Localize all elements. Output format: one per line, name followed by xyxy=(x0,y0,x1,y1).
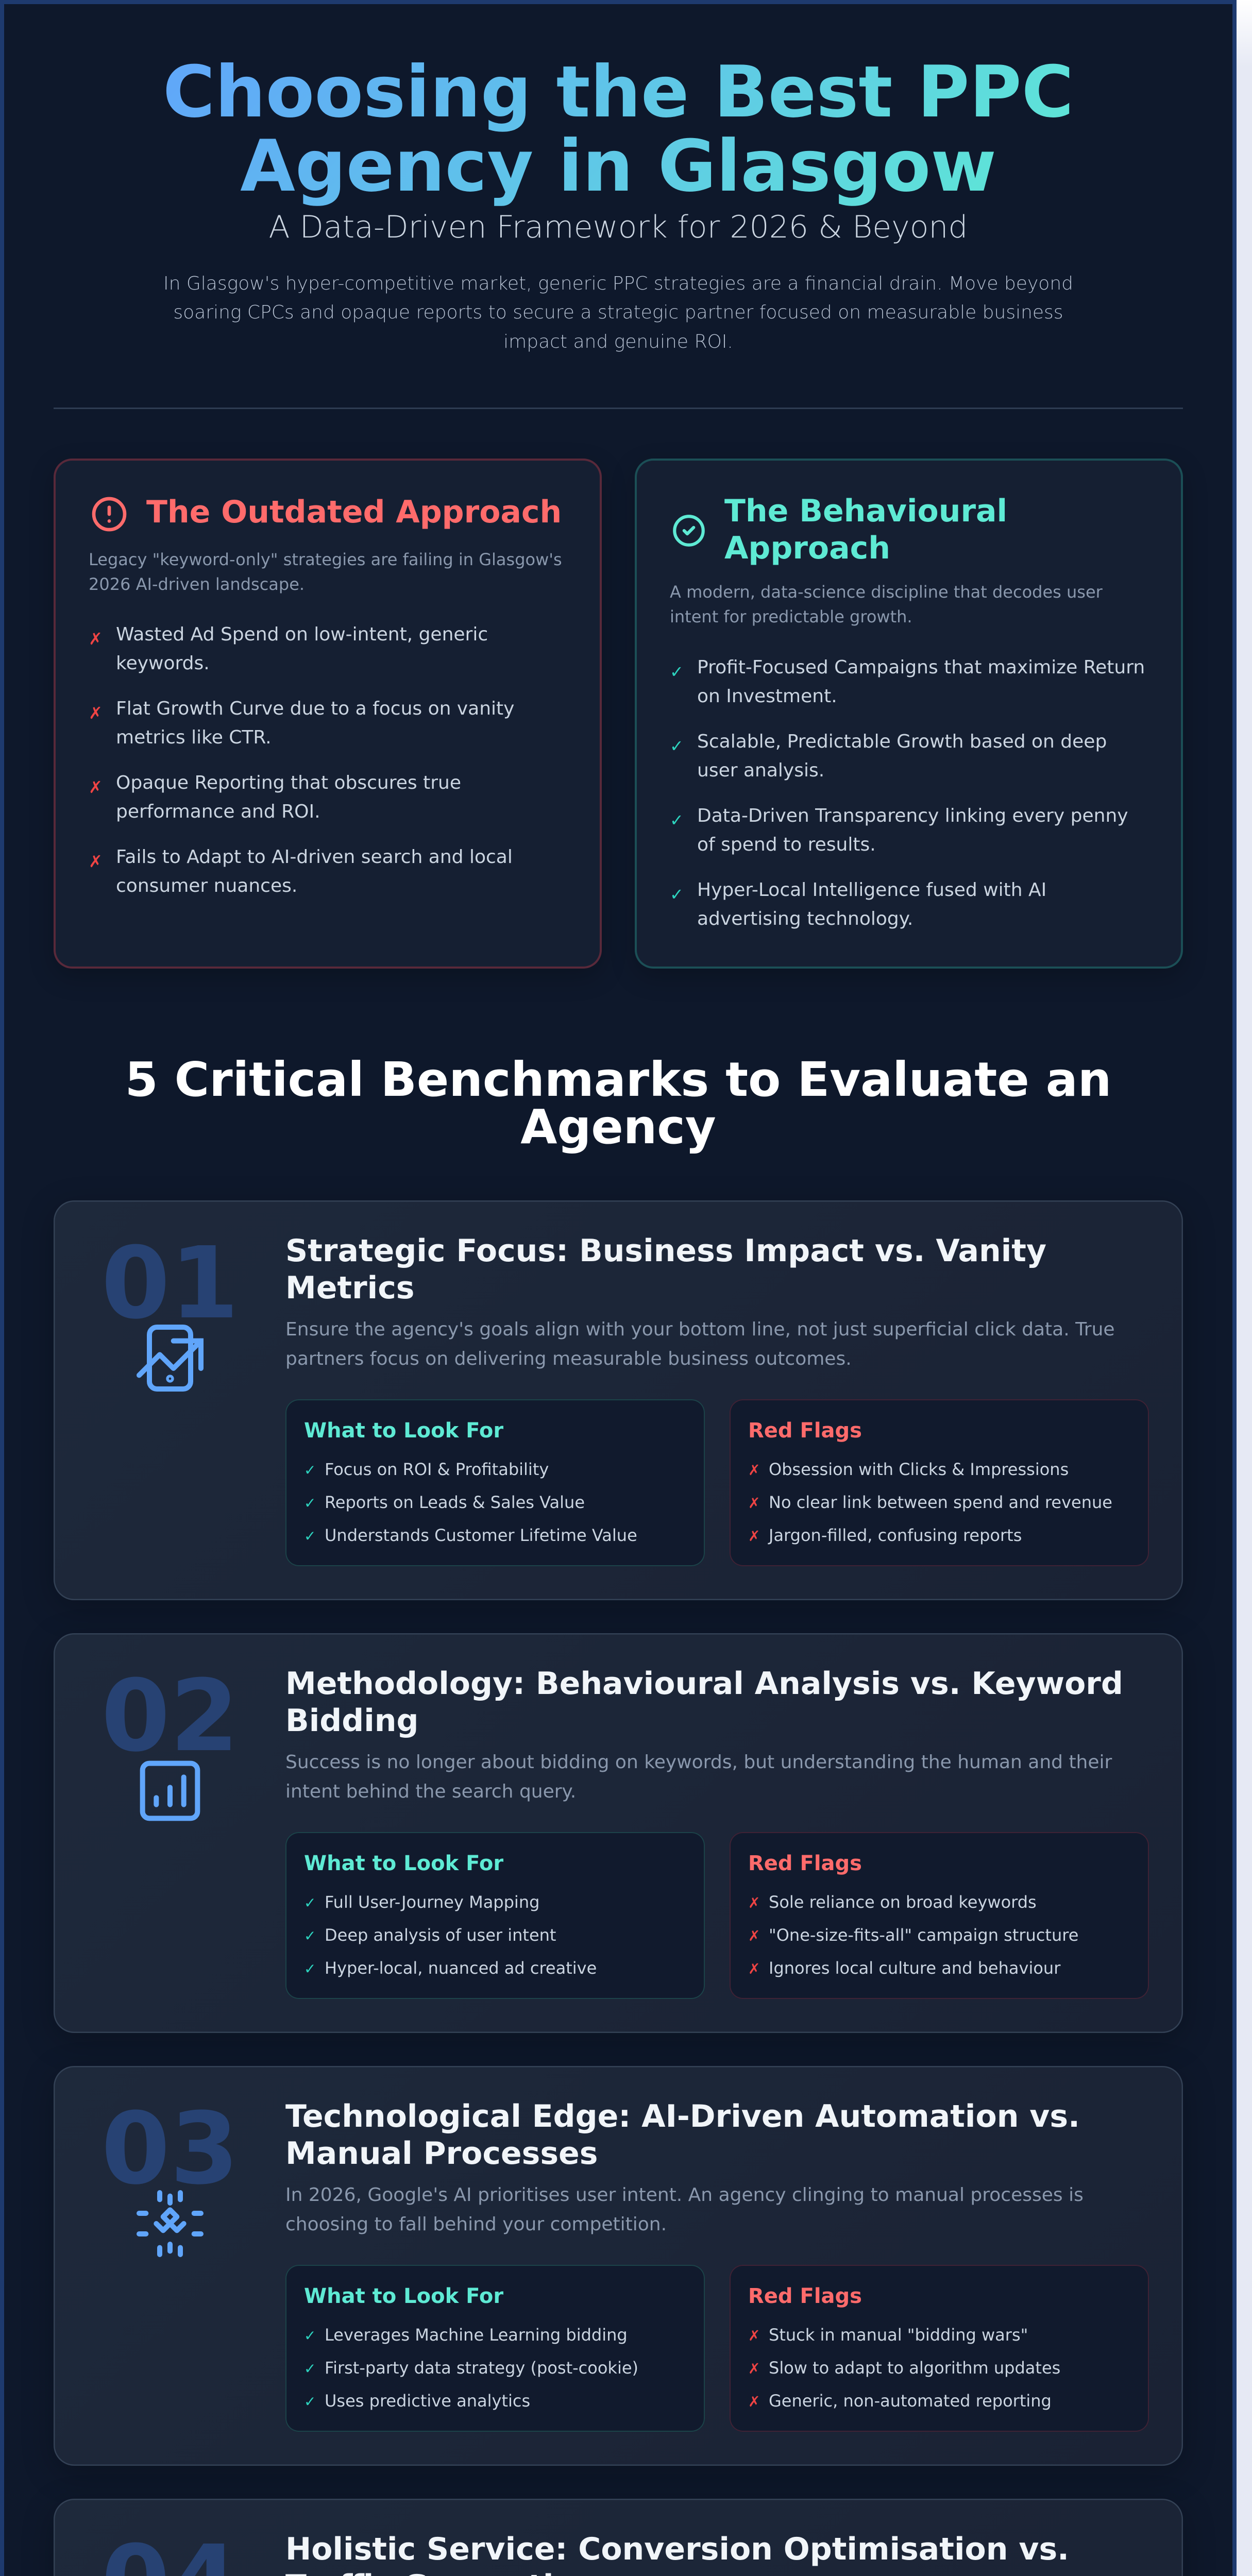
item: Uses predictive analytics xyxy=(325,2391,530,2411)
item: ✓ xyxy=(304,2360,316,2377)
item: ✓ xyxy=(304,1960,316,1977)
description: behavioural xyxy=(670,582,1103,626)
heading: the outdated approach: The Outdated Approach xyxy=(146,494,562,530)
benchmark title xyxy=(285,1233,1046,1306)
intro text: In Glasgow's hyper-competitive market, generic PPC strategies are a financial drain. Move beyond xyxy=(163,273,1073,294)
item xyxy=(748,2389,1129,2413)
list item: fails to adapt: Fails to Adapt to AI-driven search and local xyxy=(116,846,513,868)
item: Full User-Journey Mapping xyxy=(325,1892,539,1912)
benchmark title: Methodology: Behavioural Analysis vs. Keyword xyxy=(285,1666,1123,1702)
panel: benchmark 01 xyxy=(54,1200,1183,1600)
item xyxy=(748,1524,1129,1547)
benchmark title: Bidding xyxy=(285,1703,418,1739)
item: "One-size-fits-all" campaign structure xyxy=(769,1925,1078,1945)
list item: transparency: of spend to results. xyxy=(697,834,876,855)
list item: opaque reporting: performance and ROI. xyxy=(116,801,320,822)
item xyxy=(304,2357,685,2380)
item: Stuck in manual "bidding wars" xyxy=(769,2325,1028,2345)
benchmark title: Metrics xyxy=(285,1270,415,1306)
list item: fails to adapt xyxy=(89,846,513,896)
list item: profit-focused xyxy=(670,657,1145,707)
item: Leverages Machine Learning bidding xyxy=(325,2325,628,2345)
title: Agency in Glasgow xyxy=(240,125,996,208)
box heading: Red Flags xyxy=(748,1852,862,1875)
benchmark description xyxy=(285,1319,1115,1369)
item xyxy=(304,1957,685,1980)
item: ✓ xyxy=(304,1894,316,1911)
item: First-party data strategy (post-cookie) xyxy=(325,2358,638,2378)
list item: scalable growth xyxy=(670,731,1107,781)
item: ✓ xyxy=(304,2327,316,2344)
item xyxy=(748,2324,1129,2347)
item: ✓ xyxy=(304,1927,316,1944)
intro text xyxy=(163,273,1073,352)
list item: transparency xyxy=(670,805,1128,855)
icon: ai chip xyxy=(129,2182,211,2265)
list item: wasted ad spend: keywords. xyxy=(116,653,210,674)
item: Jargon-filled, confusing reports xyxy=(769,1526,1022,1545)
list item: scalable growth: Scalable, Predictable Growth based on deep xyxy=(697,731,1107,752)
list item: fails to adapt: consumer nuances. xyxy=(116,875,297,896)
list item: wasted ad spend: Wasted Ad Spend on low-intent, generic xyxy=(116,624,488,645)
list item: hyper-local: Hyper-Local Intelligence fused with AI xyxy=(697,879,1046,901)
benchmark title: Manual Processes xyxy=(285,2136,598,2172)
icon: check circle xyxy=(673,515,705,547)
benchmark title: Strategic Focus: Business Impact vs. Vanity xyxy=(285,1233,1046,1269)
list item: scalable growth: ✓ xyxy=(670,736,684,756)
item: ✗ xyxy=(748,2327,760,2344)
benchmark description xyxy=(285,2180,1151,2239)
item: ✗ xyxy=(748,1495,760,1512)
list item: wasted ad spend xyxy=(89,624,488,674)
benchmark description: choosing to fall behind your competition. xyxy=(285,2214,667,2235)
list item: opaque reporting: Opaque Reporting that obscures true xyxy=(116,772,461,793)
icon: phone with trend arrow xyxy=(137,1325,204,1392)
item: ✓ xyxy=(304,1528,316,1545)
title: Choosing the Best PPC xyxy=(163,50,1074,133)
item: ✗ xyxy=(748,2393,760,2410)
box heading: What to Look For xyxy=(304,1852,503,1875)
item xyxy=(748,1924,1129,1947)
item: Understands Customer Lifetime Value xyxy=(325,1526,637,1545)
icon: bar chart xyxy=(129,1750,211,1832)
item: Hyper-local, nuanced ad creative xyxy=(325,1958,597,1978)
item: Reports on Leads & Sales Value xyxy=(325,1493,585,1512)
list item: hyper-local: ✓ xyxy=(670,885,684,904)
list item: transparency: ✓ xyxy=(670,810,684,830)
panel: benchmark 02 xyxy=(54,1633,1183,2033)
description: behavioural: intent for predictable growth. xyxy=(670,607,912,626)
subtitle: A Data-Driven Framework for 2026 & Beyond xyxy=(268,209,968,245)
red flags box xyxy=(730,2265,1149,2432)
what to look for box xyxy=(285,2265,705,2432)
title xyxy=(155,55,1082,210)
benchmark title: Holistic Service: Conversion Optimisation vs. xyxy=(285,2531,1069,2567)
red flags box xyxy=(730,1399,1149,1566)
benchmark description: Ensure the agency's goals align with your bottom line, not just superficial click data. True xyxy=(285,1319,1115,1340)
list item: flat growth xyxy=(89,698,514,748)
what to look for box xyxy=(285,1832,705,1999)
benchmark description: intent behind the search query. xyxy=(285,1781,576,1802)
description: outdated: 2026 AI-driven landscape. xyxy=(89,574,304,594)
item: ✓ xyxy=(304,1495,316,1512)
item: ✓ xyxy=(304,2393,316,2410)
benchmark description: partners focus on delivering measurable business outcomes. xyxy=(285,1348,852,1369)
item xyxy=(748,1957,1129,1980)
list item: opaque reporting xyxy=(89,772,461,822)
list item: wasted ad spend: ✗ xyxy=(89,629,103,649)
item: ✗ xyxy=(748,2360,760,2377)
item: Sole reliance on broad keywords xyxy=(769,1892,1037,1912)
panel: benchmark 04 xyxy=(54,2499,1183,2576)
list item: flat growth: ✗ xyxy=(89,703,103,723)
benchmark description: Success is no longer about bidding on keywords, but understanding the human and their xyxy=(285,1752,1112,1773)
intro text: impact and genuine ROI. xyxy=(503,331,733,352)
item xyxy=(304,1924,685,1947)
panel: benchmark 03 xyxy=(54,2066,1183,2466)
item: ✗ xyxy=(748,1894,760,1911)
item: Focus on ROI & Profitability xyxy=(325,1460,549,1479)
description: outdated xyxy=(89,550,562,594)
section heading xyxy=(125,1052,1111,1155)
list item: profit-focused: on Investment. xyxy=(697,686,837,707)
heading: the behavioural approach xyxy=(724,493,1007,566)
number 01: 01 xyxy=(101,1226,239,1341)
item: No clear link between spend and revenue xyxy=(769,1493,1112,1512)
list item: transparency: Data-Driven Transparency linking every penny xyxy=(697,805,1128,826)
item: Ignores local culture and behaviour xyxy=(769,1958,1060,1978)
box heading: What to Look For xyxy=(304,1419,503,1443)
list item: flat growth: Flat Growth Curve due to a focus on vanity xyxy=(116,698,514,719)
heading: the behavioural approach: Approach xyxy=(724,530,890,566)
item xyxy=(304,1891,685,1914)
intro text: soaring CPCs and opaque reports to secure a strategic partner focused on measurable business xyxy=(173,302,1063,323)
list item: profit-focused: ✓ xyxy=(670,662,684,682)
item xyxy=(304,2389,685,2413)
what to look for box xyxy=(285,1399,705,1566)
item: Generic, non-automated reporting xyxy=(769,2391,1052,2411)
item: ✗ xyxy=(748,1960,760,1977)
panel: the outdated approach xyxy=(54,459,602,969)
section heading: 5 Critical Benchmarks to Evaluate an xyxy=(125,1052,1111,1107)
list item: hyper-local xyxy=(670,879,1046,929)
red flags box xyxy=(730,1832,1149,1999)
list item: profit-focused: Profit-Focused Campaigns that maximize Return xyxy=(697,657,1145,678)
item: Obsession with Clicks & Impressions xyxy=(769,1460,1069,1479)
list item: scalable growth: user analysis. xyxy=(697,760,824,781)
list item: opaque reporting: ✗ xyxy=(89,777,103,797)
panel: the behavioural approach xyxy=(635,459,1183,969)
item: Slow to adapt to algorithm updates xyxy=(769,2358,1060,2378)
heading: the behavioural approach: The Behavioural xyxy=(724,493,1007,529)
number 02: 02 xyxy=(101,1659,239,1774)
icon: alert circle xyxy=(92,497,127,532)
box heading: Red Flags xyxy=(748,1419,862,1443)
section heading: Agency xyxy=(520,1099,716,1155)
description: outdated: Legacy "keyword-only" strategies are failing in Glasgow's xyxy=(89,550,562,569)
item: Deep analysis of user intent xyxy=(325,1925,556,1945)
item xyxy=(748,1891,1129,1914)
benchmark title xyxy=(285,1665,1151,1739)
item xyxy=(304,2324,685,2347)
item: ✓ xyxy=(304,1462,316,1479)
item: ✗ xyxy=(748,1462,760,1479)
description: behavioural: A modern, data-science discipline that decodes user xyxy=(670,582,1103,602)
item xyxy=(748,2357,1129,2380)
box heading: What to Look For xyxy=(304,2284,503,2308)
item: ✗ xyxy=(748,1927,760,1944)
item: ✗ xyxy=(748,1528,760,1545)
number 03: 03 xyxy=(101,2092,239,2207)
box heading: Red Flags xyxy=(748,2284,862,2308)
list item: fails to adapt: ✗ xyxy=(89,852,103,871)
list item: hyper-local: advertising technology. xyxy=(697,908,913,929)
benchmark title: Technological Edge: AI-Driven Automation vs. xyxy=(285,2098,1080,2134)
benchmark title xyxy=(285,2098,1151,2172)
benchmark description: In 2026, Google's AI prioritises user intent. An agency clinging to manual processes is xyxy=(285,2184,1084,2206)
benchmark description xyxy=(285,1748,1151,1806)
list item: flat growth: metrics like CTR. xyxy=(116,727,272,748)
